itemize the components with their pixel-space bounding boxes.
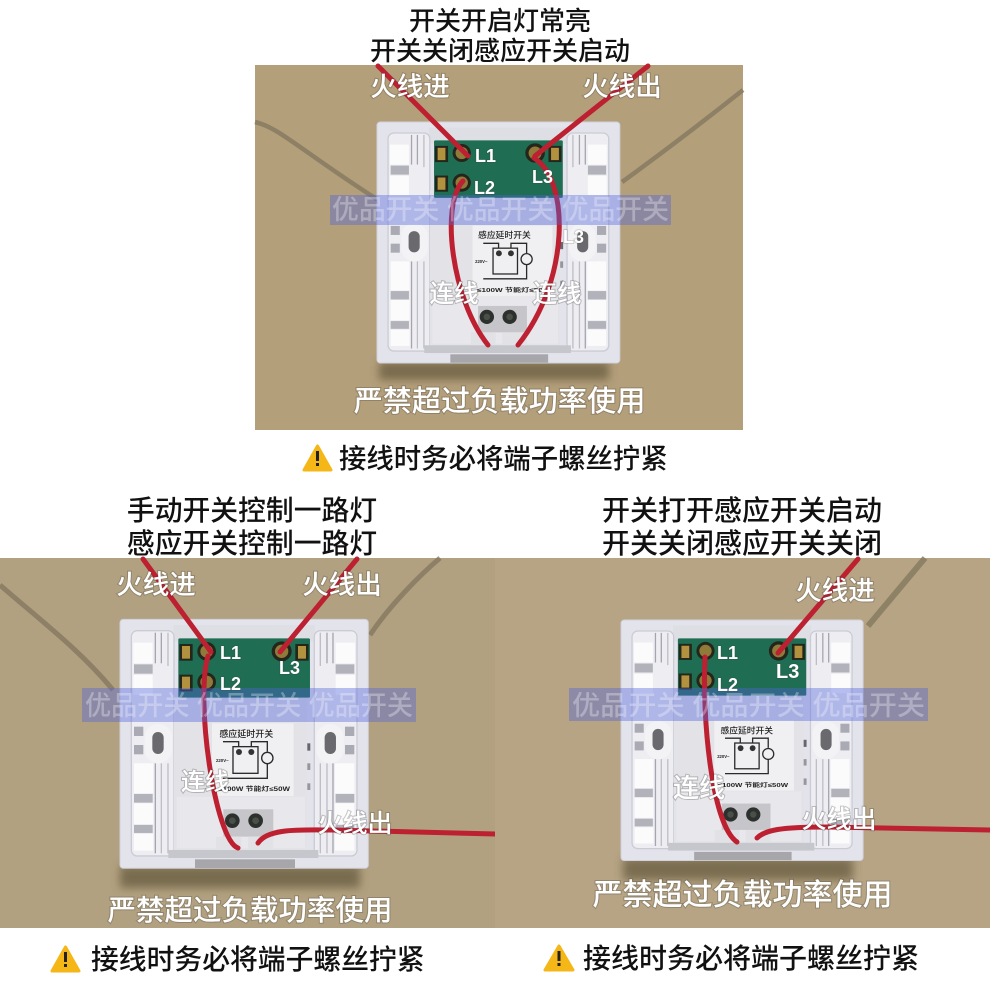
watermark band: bottom right: 优品开关 优品开关 优品开关 [572, 691, 925, 721]
switch label text: bottom left: 感应延时开关 [219, 728, 273, 739]
wire labels: top: 火线进 [370, 72, 450, 102]
heading: top diagram [370, 6, 630, 66]
switch label text: top: 220V~ [475, 259, 488, 264]
wire labels: top: 连线 [430, 280, 478, 308]
terminal labels: top [474, 146, 584, 247]
terminal labels: top: L1 [475, 146, 496, 166]
wire labels: bottom left: 严禁超过负载功率使用 [107, 895, 393, 927]
wire labels: bottom right: 火线进 [795, 576, 875, 606]
wire labels: bottom right: 火线出 [801, 806, 877, 834]
switch label text: bottom right [714, 720, 794, 791]
terminal labels: bottom right [717, 643, 799, 695]
watermark band: bottom left: 优品开关 优品开关 优品开关 [85, 691, 413, 721]
wire labels: top: 连线 [532, 280, 582, 308]
wires: bottom left [143, 559, 495, 848]
switch label text: top: ≤100W 节能灯≤50W [477, 286, 551, 294]
terminal labels: bottom right: L3 [776, 661, 799, 683]
heading: bottom left diagram [127, 495, 377, 559]
warning note: top: 接线时务必将端子螺丝拧紧 [339, 443, 668, 474]
warning note: bottom right: 接线时务必将端子螺丝拧紧 [583, 943, 919, 974]
photo background: top [255, 65, 743, 430]
panel: bottom right wiring photo [495, 558, 990, 928]
wire labels: top: 火线出 [582, 72, 662, 102]
terminal labels: bottom left: L2 [220, 674, 241, 694]
wire labels: top: 严禁超过负载功率使用 [354, 385, 645, 418]
terminal labels: bottom left: L1 [220, 643, 241, 663]
wire labels: top [354, 72, 662, 418]
switch label text: bottom right: 220V~ [717, 754, 730, 759]
heading: bottom right diagram: 开关关闭感应开关关闭 [602, 528, 882, 559]
switch label text: bottom right: 感应延时开关 [720, 725, 773, 736]
switch label text: bottom left [212, 723, 294, 796]
terminal labels: bottom left [220, 643, 300, 694]
switch label text: bottom right: ≤100W 节能灯≤50W [718, 781, 789, 789]
heading: bottom right diagram [602, 495, 882, 559]
switch label text: bottom left: 220V~ [216, 758, 229, 763]
wire labels: bottom left: 连线 [181, 769, 229, 796]
wire labels: bottom right: 严禁超过负载功率使用 [592, 879, 892, 912]
terminal labels: top: L2 [474, 178, 495, 198]
terminal labels: top: L3 [563, 227, 584, 247]
wire labels: bottom left: 火线进 [116, 570, 196, 600]
terminal labels: bottom right: L1 [717, 643, 738, 663]
heading: top diagram: 开关开启灯常亮 [409, 6, 591, 36]
icon: warning [545, 946, 573, 970]
icon: warning [52, 947, 79, 971]
icon: warning [304, 446, 331, 470]
panel: top wiring photo [255, 65, 743, 430]
switch label text: bottom left: ≤100W 节能灯≤50W [218, 785, 290, 793]
wires: bottom right [704, 559, 990, 842]
wires: top [378, 66, 648, 345]
heading: bottom right diagram: 开关打开感应开关启动 [602, 495, 882, 526]
terminal labels: top: L3 [532, 167, 553, 187]
panel: bottom left wiring photo [0, 558, 495, 928]
wire labels: bottom right: 连线 [673, 773, 725, 803]
wire labels: bottom right [592, 576, 892, 912]
switch label text: top [472, 226, 552, 296]
wire labels: bottom left: 火线出 [317, 810, 393, 838]
switch label text: top: 感应延时开关 [478, 229, 531, 240]
wire labels: bottom left: 火线出 [302, 570, 382, 600]
heading: top diagram: 开关关闭感应开关启动 [370, 36, 630, 66]
heading: bottom left diagram: 手动开关控制一路灯 [127, 495, 377, 526]
photo background: bottom right [495, 558, 990, 928]
warning note: bottom left: 接线时务必将端子螺丝拧紧 [91, 944, 425, 975]
terminal labels: bottom right: L2 [717, 675, 738, 695]
watermark band: top: 优品开关 优品开关 优品开关 [332, 195, 669, 225]
photo background: bottom left [0, 558, 495, 928]
terminal labels: bottom left: L3 [279, 658, 300, 678]
heading: bottom left diagram: 感应开关控制一路灯 [127, 528, 377, 559]
wire labels: bottom left [107, 570, 393, 927]
